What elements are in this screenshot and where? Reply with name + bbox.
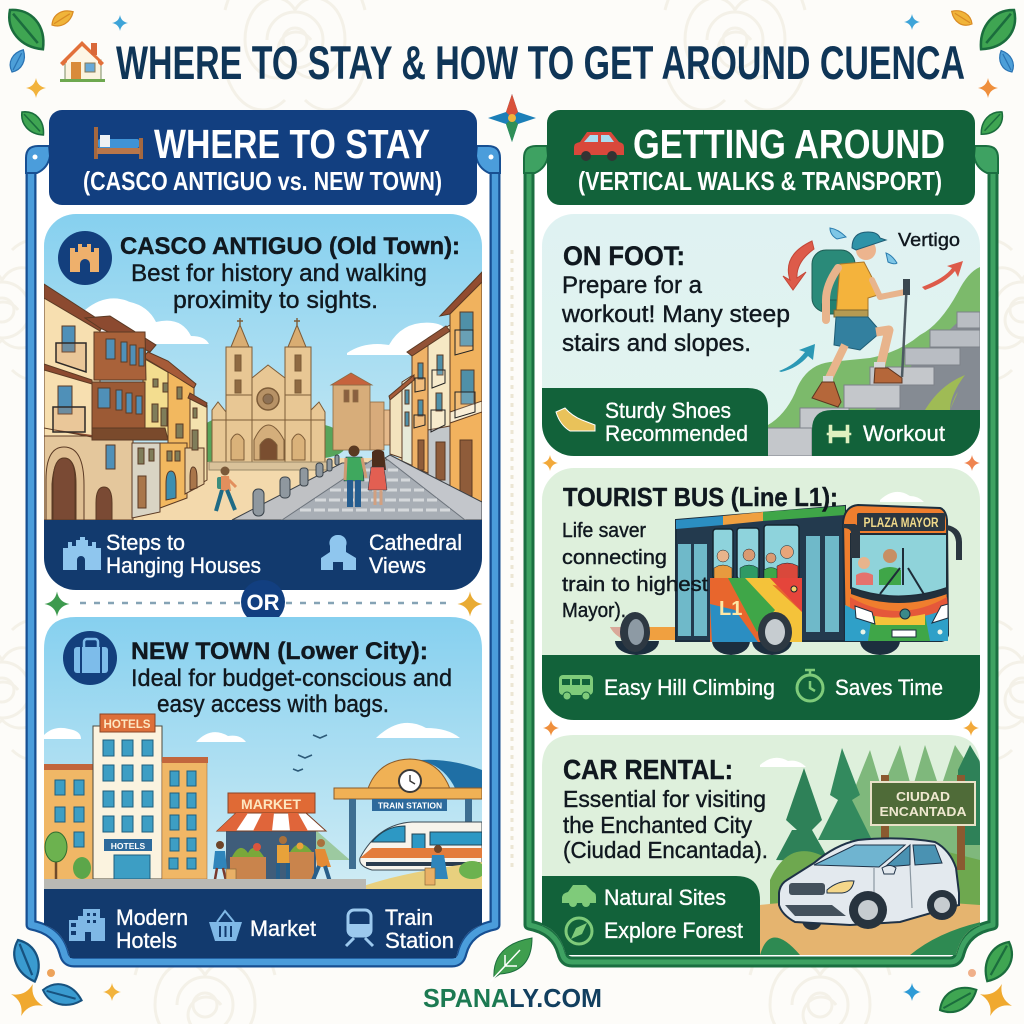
new town text: Ideal for budget-conscious and xyxy=(131,665,452,692)
new town text: NEW TOWN (Lower City): xyxy=(131,638,428,665)
feature: steps to hanging houses: Hanging Houses xyxy=(106,553,261,578)
bus front xyxy=(843,505,962,641)
card: on foot xyxy=(542,214,980,456)
header subtitle: (VERTICAL WALKS & TRANSPORT) xyxy=(578,166,942,196)
mid windows xyxy=(138,379,198,464)
icon: bed xyxy=(94,127,143,159)
icon: house xyxy=(60,41,105,82)
card: tourist bus xyxy=(542,468,980,720)
bus front: PLAZA MAYOR xyxy=(864,515,939,530)
distant tower xyxy=(331,373,392,450)
feature: steps to hanging houses xyxy=(106,530,261,578)
icon: compass xyxy=(566,918,592,944)
icon: cathedral xyxy=(321,535,356,570)
icon: shoe xyxy=(556,408,595,431)
bus illustration xyxy=(610,505,962,655)
old town text: proximity to sights. xyxy=(173,287,378,314)
car text: CAR RENTAL: xyxy=(563,754,733,785)
sign: CIUDAD xyxy=(896,789,950,804)
greenery xyxy=(203,420,346,462)
panel frame green xyxy=(524,146,998,962)
stairs xyxy=(760,312,980,456)
on foot footer content xyxy=(556,398,945,446)
bus windows xyxy=(713,525,799,579)
logo leaf xyxy=(490,938,532,982)
icon: modern hotels xyxy=(69,909,105,941)
card footer xyxy=(44,889,482,959)
panel header xyxy=(49,110,477,205)
on foot text: ON FOOT: xyxy=(563,241,685,271)
train station xyxy=(334,759,485,889)
icon: green car xyxy=(562,885,596,907)
decorative corner leaves top left xyxy=(1,2,128,140)
ground xyxy=(760,900,980,955)
car text xyxy=(563,754,768,863)
cloud xyxy=(880,492,924,502)
car xyxy=(779,838,959,930)
feature: cathedral views: Views xyxy=(369,553,426,578)
icon: red car xyxy=(574,132,624,161)
new town text xyxy=(131,638,452,718)
hotels xyxy=(44,714,208,879)
panel: where to stay xyxy=(26,110,500,962)
card: new town xyxy=(44,617,485,959)
feature: sturdy shoes xyxy=(605,398,748,446)
balconies xyxy=(53,343,86,432)
feature: saves time: Saves Time xyxy=(835,675,943,700)
vertigo label: Vertigo xyxy=(898,230,960,250)
cream house xyxy=(44,292,100,437)
old town text: Best for history and walking xyxy=(131,260,427,287)
icon: market basket xyxy=(209,911,242,941)
bus text: Mayor). xyxy=(562,600,626,622)
stone base xyxy=(44,436,133,520)
car text: (Ciudad Encantada). xyxy=(563,837,768,863)
card footer xyxy=(542,876,760,955)
hiker xyxy=(812,228,910,407)
old town text: CASCO ANTIGUO (Old Town): xyxy=(120,233,460,260)
new town footer content xyxy=(69,905,454,953)
bus text xyxy=(562,482,838,622)
arrows xyxy=(779,241,963,372)
car text: Essential for visiting xyxy=(563,786,766,812)
header subtitle: (CASCO ANTIGUO vs. NEW TOWN) xyxy=(83,166,442,196)
decorative corner leaves bottom left xyxy=(5,936,121,1022)
icon: compass star xyxy=(488,94,536,142)
footer bars xyxy=(542,388,980,456)
sign: ENCANTADA xyxy=(880,804,967,819)
green hill xyxy=(768,267,980,456)
right buildings xyxy=(389,272,482,502)
bus text: connecting xyxy=(562,547,667,569)
feature: workout: Workout xyxy=(863,421,945,446)
new town illustration xyxy=(44,714,485,890)
header title: GETTING AROUND xyxy=(633,121,945,167)
sign xyxy=(871,775,975,870)
bus footer content xyxy=(559,670,943,701)
cathedral xyxy=(209,318,329,470)
sidewalks and street xyxy=(232,455,482,520)
panel frame blue xyxy=(26,146,500,962)
underbody arcs xyxy=(615,641,900,655)
wooden bays xyxy=(94,332,146,380)
decorative corner leaves bottom right xyxy=(903,937,1019,1022)
on foot text xyxy=(561,241,790,357)
header title: WHERE TO STAY xyxy=(154,121,430,167)
body xyxy=(676,506,845,641)
card footer xyxy=(44,520,482,590)
feature: steps to hanging houses: Steps to xyxy=(106,530,185,555)
feature: train station: Train xyxy=(385,905,433,930)
plant xyxy=(925,375,965,410)
on foot text: stairs and slopes. xyxy=(562,330,751,357)
icon: castle xyxy=(63,537,101,570)
L1 wrap xyxy=(710,578,802,642)
brand: SPANALY.COM xyxy=(423,983,602,1013)
old town footer content xyxy=(63,530,462,578)
feature: modern hotels xyxy=(116,905,188,953)
feature: modern hotels: Hotels xyxy=(116,928,177,953)
feature: natural sites: Natural Sites xyxy=(604,885,726,910)
decorative corner leaves top right xyxy=(904,2,1024,140)
tail xyxy=(610,627,676,640)
roof bands xyxy=(44,284,104,331)
feature: modern hotels: Modern xyxy=(116,905,188,930)
or divider xyxy=(44,580,482,624)
roof stripe xyxy=(676,506,845,529)
icon: dumbbell xyxy=(827,425,851,443)
couple walking xyxy=(344,446,387,507)
new town text: easy access with bags. xyxy=(157,691,389,718)
or divider: OR xyxy=(246,590,280,615)
car text: the Enchanted City xyxy=(563,812,752,838)
bushes xyxy=(760,920,990,955)
hotels: HOTELS xyxy=(104,719,151,731)
stars between cards xyxy=(542,455,980,736)
market: MARKET xyxy=(241,796,301,812)
feature: easy hill climbing: Easy Hill Climbing xyxy=(604,675,775,700)
old town icon xyxy=(58,231,112,285)
hotels: HOTELS xyxy=(111,841,146,851)
car footer content xyxy=(562,885,743,944)
on foot text: Prepare for a xyxy=(562,272,703,299)
left buildings xyxy=(44,284,207,520)
card: casco antiguo xyxy=(44,214,482,590)
L1 label: L1 xyxy=(719,598,742,620)
panel: getting around xyxy=(524,110,998,962)
feature: train station: Station xyxy=(385,928,454,953)
bus text: Life saver xyxy=(562,520,646,542)
on foot text: workout! Many steep xyxy=(561,301,790,328)
card: car rental xyxy=(542,735,990,955)
icon: train xyxy=(346,910,373,946)
clouds xyxy=(85,298,445,355)
bollards xyxy=(253,455,339,516)
card footer xyxy=(542,655,980,720)
bus text: TOURIST BUS (Line L1): xyxy=(563,482,838,512)
feature: sturdy shoes: Sturdy Shoes xyxy=(605,398,731,423)
street xyxy=(44,879,366,890)
feature: cathedral views xyxy=(369,530,462,578)
doors xyxy=(46,447,84,520)
feature: train station xyxy=(385,905,454,953)
passengers xyxy=(714,546,798,579)
feature: explore forest: Explore Forest xyxy=(604,918,743,943)
icon: green bus xyxy=(559,675,593,700)
old town illustration xyxy=(44,272,482,523)
mid buildings xyxy=(142,360,168,436)
rear doors xyxy=(678,536,839,636)
new town icon xyxy=(63,631,117,685)
feature: market: Market xyxy=(250,916,316,941)
forest xyxy=(760,745,985,910)
feature: cathedral views: Cathedral xyxy=(369,530,462,555)
plaza xyxy=(134,458,428,520)
market xyxy=(213,793,331,885)
bus text: train to highest xyxy=(562,574,708,596)
wooden bay windows xyxy=(58,326,144,469)
feature: sturdy shoes: Recommended xyxy=(605,421,748,446)
icon: stopwatch xyxy=(797,670,823,701)
bus wheels xyxy=(620,612,792,652)
train station: TRAIN STATION xyxy=(378,800,442,810)
panel header xyxy=(547,110,975,205)
old town text xyxy=(120,233,460,314)
person walking xyxy=(216,466,236,511)
